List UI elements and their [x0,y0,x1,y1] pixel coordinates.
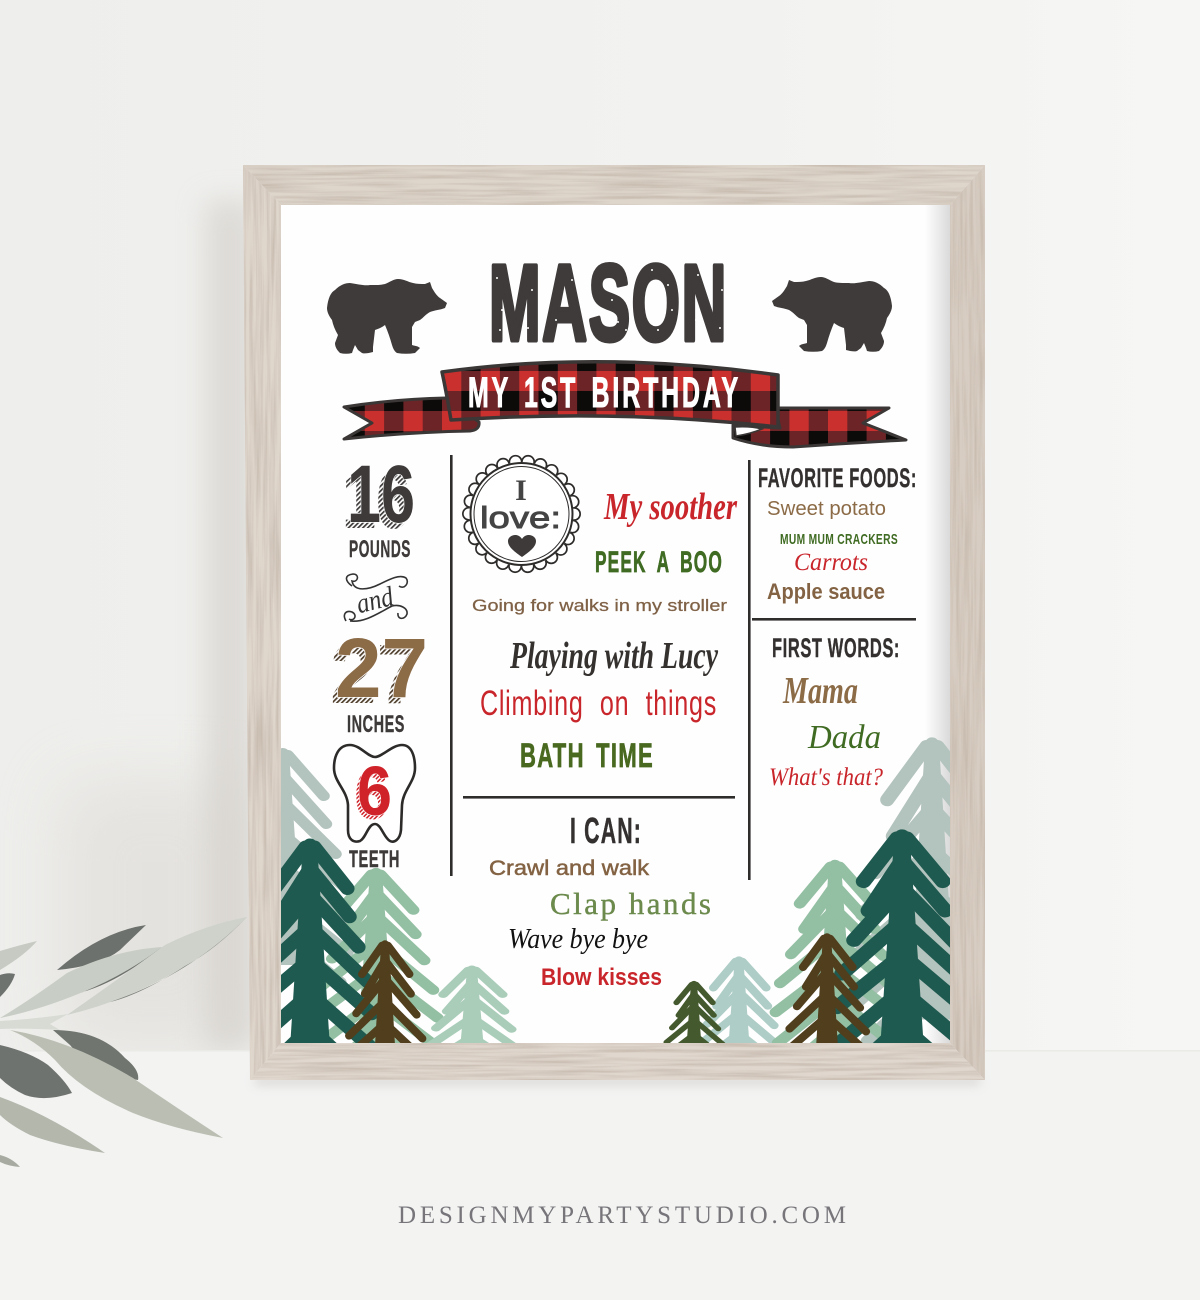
item: my soother: My soother [603,486,738,528]
divider: right horizontal [752,618,916,621]
heading: first words: FIRST WORDS: [772,633,900,663]
stamp: I love badge [469,462,574,566]
word: what's that: What's that? [769,764,883,791]
item: climbing on things: Climbing on things [480,684,717,723]
ribbon main band [442,362,778,427]
tree: right brown [785,933,870,1043]
divider: middle horizontal [463,796,735,799]
item: crawl and walk: Crawl and walk [489,857,650,880]
soft lower-left wall shade [60,780,250,1050]
label: teeth: TEETH [349,846,400,873]
shelf surface [0,1051,1200,1300]
item: clap hands: Clap hands [550,886,711,921]
frame shadow on wall [205,200,255,1050]
forest trees along bottom of poster [218,744,1010,1109]
icon: tooth with 6: 6 [357,752,392,830]
ribbon right tail [733,408,906,447]
food: mum mum crackers: MUM MUM CRACKERS [780,531,898,548]
number: 16 pounds: 16 [342,455,410,546]
item: bath time: BATH TIME [520,737,654,775]
flourish: and [344,574,407,621]
tree: small olive [664,980,726,1043]
banner text: my 1st birthday: MY 1ST BIRTHDAY [468,369,741,417]
number: 27 inches: 27 [330,627,423,721]
item: playing with lucy: Playing with Lucy [509,635,718,677]
stamp: I love badge: I [515,474,527,507]
panel: left stats column [330,449,428,873]
ribbon left tail [344,398,479,439]
icon: tooth with 6: 6 [354,756,389,834]
item: wave bye bye: Wave bye bye [508,924,648,955]
tree: left grey [281,748,354,982]
tree: left light green [326,868,444,1043]
tree: right grey [855,737,950,1043]
footer: website: DESIGNMYPARTYSTUDIO.COM [398,1202,846,1229]
divider: right vertical [748,460,751,880]
icon: left bear [327,279,447,354]
stamp: I love badge: love: [480,500,561,535]
panel: I can list [489,810,711,991]
panel: I love list [469,462,738,775]
title: MASON: MASON [489,242,728,363]
food: sweet potato: Sweet potato [767,498,886,520]
panel: first words [769,633,900,791]
label: pounds: POUNDS [349,536,411,563]
label: inches: INCHES [347,711,405,738]
item: going for walks: Going for walks in my stroller [472,596,727,615]
tree: pale right [702,956,779,1043]
ribbon fold right [735,427,762,436]
flourish: and: and [353,581,397,620]
printed poster sheet [281,205,950,1043]
tree: right dark green [834,829,950,1043]
number: 27 inches: 27 [335,621,428,715]
frame shadow on shelf [255,1077,980,1085]
icon: right bear [772,277,892,352]
word: dada: Dada [807,719,881,756]
wooden picture frame [243,165,985,1080]
item: blow kisses: Blow kisses [541,964,662,991]
word: mama: Mama [782,670,858,712]
icon: tooth with 6 [334,745,415,842]
food: apple sauce: Apple sauce [767,579,885,604]
item: peek a boo: PEEK A BOO [595,546,723,579]
heading: favorite foods: FAVORITE FOODS: [758,463,917,493]
food: carrots: Carrots [794,549,868,576]
divider: left vertical [450,455,453,876]
tree: right light green [770,860,886,1043]
poster side shading [925,205,950,1043]
tree: left brown [345,940,426,1043]
tree: left dark green [281,838,377,1043]
heading: I can: I CAN: [570,810,642,851]
plaid ribbon banner [344,362,906,447]
shelf edge line [0,1050,1200,1052]
number: 16 pounds: 16 [347,449,415,540]
olive branch decoration [0,917,247,1167]
tree: pale left [427,966,516,1043]
panel: favorite foods [758,463,917,604]
